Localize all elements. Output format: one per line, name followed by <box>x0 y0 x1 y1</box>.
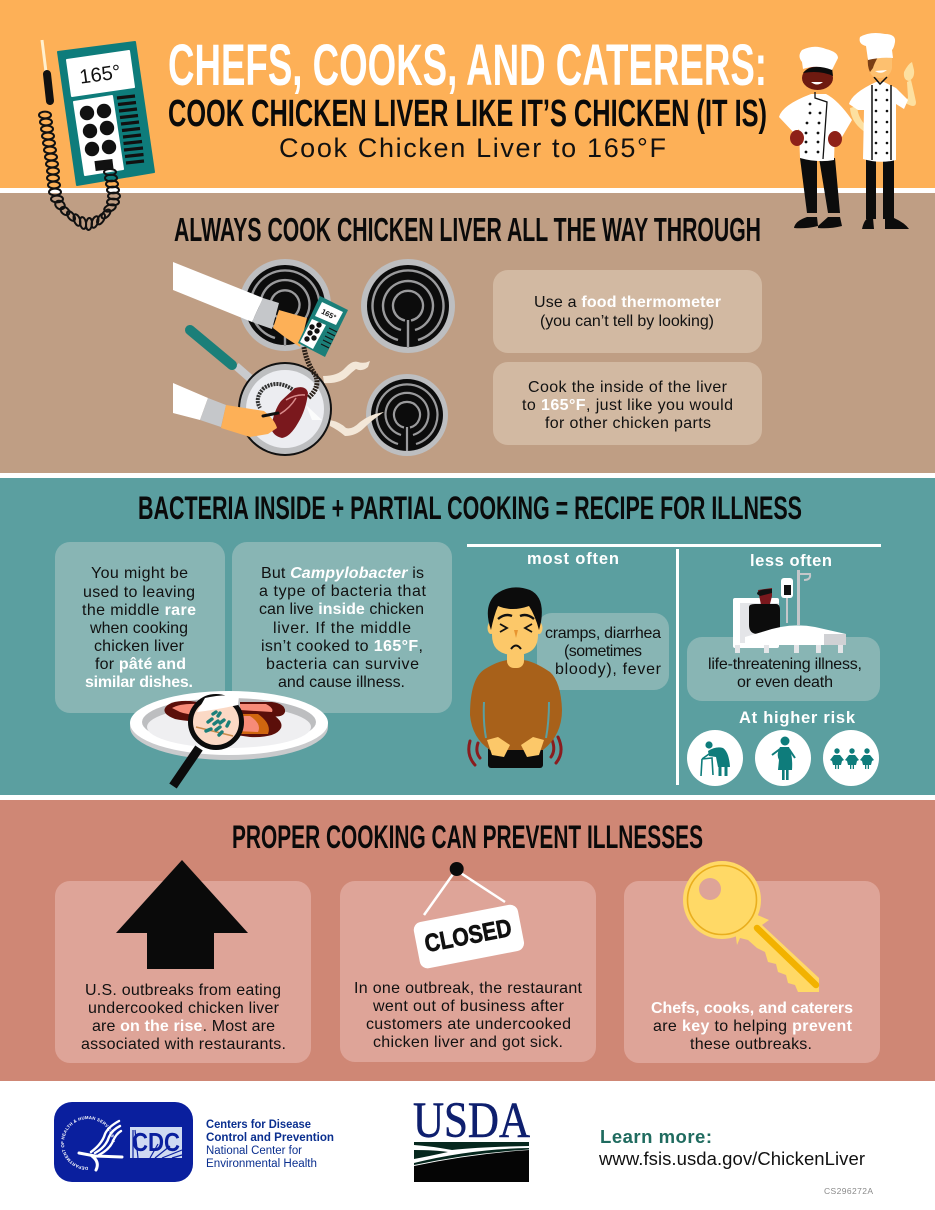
text box: leaving the middle rare: similar dishes. <box>85 674 193 691</box>
icon: key <box>683 861 819 992</box>
callout: cook inside to 165 <box>493 362 762 445</box>
icon: up arrow <box>116 860 248 969</box>
text: CDC name: Centers for Disease <box>206 1119 311 1131</box>
divider lines: most often / less often <box>467 544 881 785</box>
callout: use a food thermometer <box>493 270 762 353</box>
title: Cook Chicken Liver to 165°F <box>279 133 666 163</box>
icon: closed sign: CLOSED <box>422 914 514 958</box>
panel: header band <box>0 0 935 188</box>
text box: campylobacter: a type of bacteria that <box>259 583 427 600</box>
liver <box>271 387 308 438</box>
heading: proper cooking: PROPER COOKING CAN PREVENT ILLNESSES <box>232 819 703 855</box>
burner top right <box>361 259 455 353</box>
card: closed restaurant: went out of business after <box>372 998 565 1015</box>
card: on the rise: are on the rise. Most are <box>92 1018 275 1035</box>
label: at higher risk: At higher risk <box>739 709 856 727</box>
text box: campylobacter: can live inside chicken <box>259 601 424 618</box>
card: closed restaurant <box>340 862 596 1062</box>
text box: campylobacter: isn’t cooked to 165°F, <box>261 638 423 655</box>
card: key to prevention <box>624 861 880 1063</box>
upper arm <box>173 262 263 322</box>
logo: HHS and CDC: DEPARTMENT OF HEALTH & HUMAN SERVICES USA <box>61 1116 115 1170</box>
text: learn more: www.fsis.usda.gov/ChickenLiver <box>598 1148 865 1169</box>
card: on the rise: U.S. outbreaks from eating <box>85 982 281 999</box>
icon: food thermometer: 165° <box>78 61 122 89</box>
text box: leaving the middle rare: You might be <box>91 565 188 582</box>
text box: leaving the middle rare: chicken liver <box>94 638 185 655</box>
text: publication code: CS296272A <box>824 1186 873 1196</box>
text box: campylobacter <box>232 542 452 713</box>
callout: cramps: cramps, diarrhea <box>545 625 661 642</box>
card: closed restaurant: In one outbreak, the restaurant <box>354 980 583 997</box>
card: closed restaurant: customers ate undercooked <box>366 1016 571 1033</box>
callout: use a food thermometer: Use a food thermometer <box>534 294 721 311</box>
icon: food thermometer <box>39 40 154 230</box>
title <box>168 33 767 163</box>
label: most often: most often <box>527 550 619 568</box>
text: learn more: Learn more: <box>600 1126 712 1147</box>
callout: cramps: (sometimes <box>564 643 642 660</box>
logo: HHS and CDC <box>54 1102 193 1182</box>
small thermometer: 165° <box>320 307 338 322</box>
text: CDC name: National Center for <box>206 1145 302 1157</box>
text box: campylobacter: and cause illness. <box>278 674 405 691</box>
text box: campylobacter: bacteria can survive <box>266 656 419 673</box>
panel: prevention band <box>0 800 935 1081</box>
text box: leaving the middle rare: used to leaving <box>83 584 195 601</box>
card: key to prevention: Chefs, cooks, and caterers <box>651 1000 853 1017</box>
lower arm <box>173 383 208 420</box>
text box: leaving the middle rare <box>55 542 225 713</box>
text: CDC name: Control and Prevention <box>206 1132 334 1144</box>
text box: campylobacter: But Campylobacter is <box>261 565 424 582</box>
callout: life-threatening <box>687 637 880 701</box>
icon: older adult <box>687 730 743 786</box>
callout: life-threatening: life-threatening illness, <box>708 656 862 673</box>
icon: children <box>823 730 879 786</box>
logo: HHS and CDC: CDC <box>132 1127 180 1157</box>
card: closed restaurant: chicken liver and got sick. <box>373 1034 563 1051</box>
right chef <box>849 33 916 229</box>
icon: two chefs <box>779 33 916 229</box>
callout: cook inside to 165: to 165°F, just like you would <box>522 397 733 414</box>
icon: pregnant woman <box>755 730 811 786</box>
logo: USDA <box>413 1093 530 1182</box>
illustration: plate with liver and magnifying glass <box>130 691 328 786</box>
text box: leaving the middle rare: the middle rare <box>82 602 196 619</box>
pan handle <box>236 366 252 380</box>
burner bottom right <box>366 374 448 456</box>
callout: cook inside to 165: Cook the inside of the liver <box>528 379 728 396</box>
pan <box>238 362 332 456</box>
callout: cramps <box>537 613 669 690</box>
panel: cook all the way band <box>0 193 935 473</box>
card: key to prevention: are key to helping prevent <box>653 1018 853 1035</box>
icon: closed sign <box>412 862 525 970</box>
callout: cook inside to 165: for other chicken parts <box>545 415 711 432</box>
illustration: hospital bed <box>733 570 846 653</box>
tremor marks <box>469 737 561 765</box>
text: learn more <box>598 1126 865 1169</box>
left chef <box>779 47 852 228</box>
text: CDC name <box>206 1119 334 1170</box>
cord in pan <box>304 347 317 398</box>
small thermometer <box>298 296 348 357</box>
callout: cramps: bloody), fever <box>555 661 662 678</box>
card: on the rise: undercooked chicken liver <box>88 1000 280 1017</box>
text box: campylobacter: liver. If the middle <box>273 620 411 637</box>
illustration: stove with pan and thermometer <box>173 259 455 456</box>
text: CDC name: Environmental Health <box>206 1158 317 1170</box>
card: on the rise: associated with restaurants. <box>81 1036 286 1053</box>
burner top left <box>239 259 331 351</box>
steam <box>323 361 384 436</box>
panel: bacteria band <box>0 478 935 795</box>
text box: leaving the middle rare: for pâté and <box>95 656 186 673</box>
card: on the rise <box>55 860 311 1063</box>
label: less often: less often <box>750 552 832 570</box>
logo: USDA: USDA <box>413 1093 530 1149</box>
card: key to prevention: these outbreaks. <box>690 1036 812 1053</box>
callout: use a food thermometer: (you can’t tell by looking) <box>540 313 714 330</box>
text box: leaving the middle rare: when cooking <box>89 620 188 637</box>
callout: life-threatening: or even death <box>737 674 833 691</box>
illustration: sick man <box>469 587 562 768</box>
